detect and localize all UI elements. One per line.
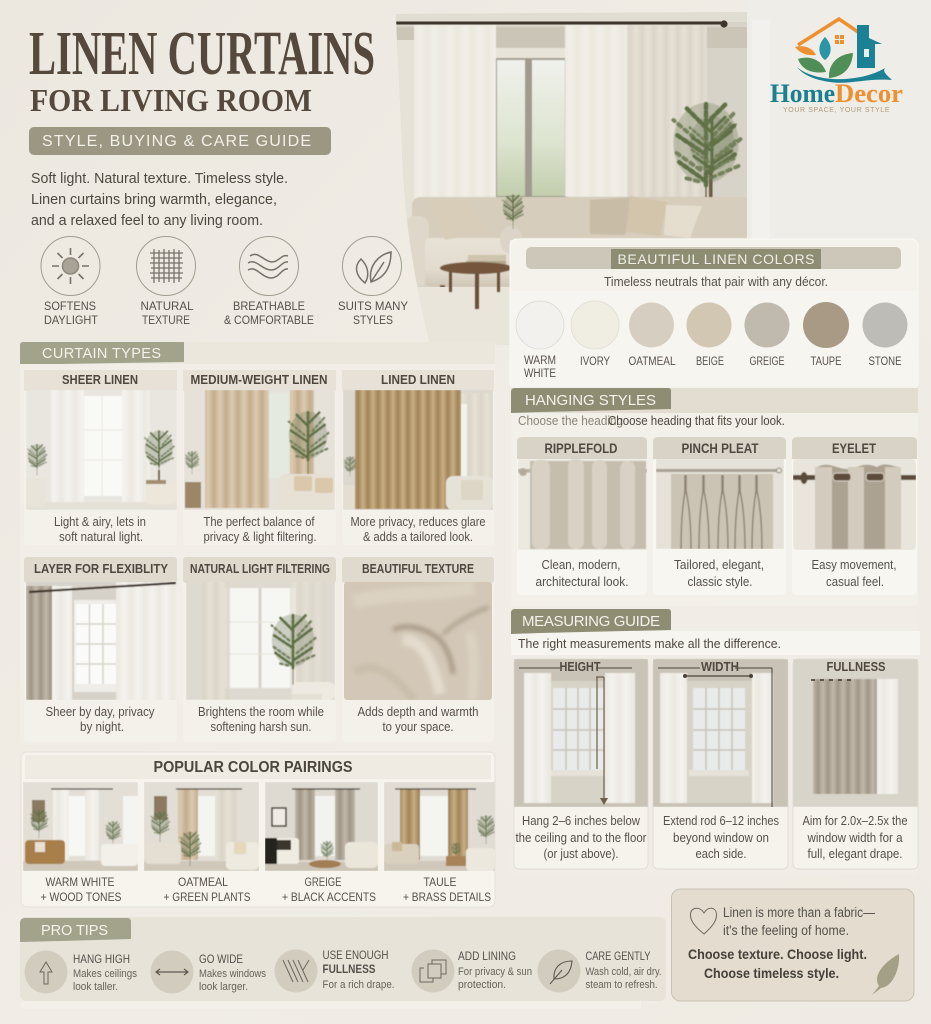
card: natural light filtering: softening harsh sun. xyxy=(210,720,312,734)
pairing labels: + WOOD TONES xyxy=(40,890,122,904)
feature: suits many styles xyxy=(338,236,408,327)
swatch labels: STONE xyxy=(868,356,902,368)
swatch labels xyxy=(524,355,902,380)
panel: hanging styles xyxy=(511,388,918,606)
call to action xyxy=(688,946,867,981)
logo wordmark xyxy=(770,79,903,108)
card: fullness xyxy=(793,659,918,869)
swatch labels: BEIGE xyxy=(696,356,724,368)
pairing labels: + BRASS DETAILS xyxy=(403,890,491,904)
tip: add lining: ADD LINING xyxy=(458,949,516,963)
heading tab xyxy=(20,918,131,942)
logo wordmark: Decor xyxy=(835,79,903,108)
feature: natural texture xyxy=(136,236,196,327)
card: lined linen: & adds a tailored look. xyxy=(363,530,473,544)
logo tagline: YOUR SPACE, YOUR STYLE xyxy=(783,107,890,114)
heading: POPULAR COLOR PAIRINGS xyxy=(154,759,353,776)
card: medium-weight linen: The perfect balance of xyxy=(204,515,315,529)
illustration xyxy=(518,459,647,550)
heading tab: PRO TIPS xyxy=(41,923,108,939)
vase with sprig xyxy=(500,195,524,254)
title: LINEN CURTAINS xyxy=(29,20,375,88)
subheading: Choose heading that fits your look. xyxy=(608,414,785,428)
tip: care gently: Wash cold, air dry. xyxy=(586,966,662,978)
card: width: each side. xyxy=(696,846,746,861)
subheading: Timeless neutrals that pair with any décor. xyxy=(604,274,828,289)
card: beautiful texture xyxy=(342,557,494,742)
feature: breathable: BREATHABLE xyxy=(233,299,305,313)
tip: care gently xyxy=(538,949,662,992)
card: height: Hang 2–6 inches below xyxy=(522,813,641,828)
tip: hang high xyxy=(24,950,137,994)
card: sheer linen: soft natural light. xyxy=(59,530,143,544)
subheading xyxy=(518,414,785,428)
icon: sun xyxy=(41,236,100,296)
icon: leaves xyxy=(342,236,402,296)
card: pinch pleat: classic style. xyxy=(688,574,752,589)
coffee table xyxy=(440,255,512,309)
tip: add lining: For privacy & sun xyxy=(458,966,532,978)
swatches xyxy=(516,301,908,349)
card: eyelet: Easy movement, xyxy=(812,557,896,572)
swatch labels: TAUPE xyxy=(810,356,842,368)
card: eyelet xyxy=(792,437,917,595)
pairing labels: + GREEN PLANTS xyxy=(164,890,250,904)
card: ripplefold: architectural look. xyxy=(536,574,628,589)
feature: softens daylight: DAYLIGHT xyxy=(44,313,99,327)
card: eyelet: casual feel. xyxy=(826,574,884,589)
photo xyxy=(343,390,493,510)
quote text xyxy=(723,905,875,938)
card: medium-weight linen: privacy & light filtering. xyxy=(204,530,316,544)
icon: waves xyxy=(240,236,298,296)
card: lined linen xyxy=(342,370,494,545)
tip: use enough fullness: FULLNESS xyxy=(322,962,376,976)
wall behind logo xyxy=(747,0,931,240)
card: eyelet: EYELET xyxy=(832,441,877,456)
card: natural light filtering: NATURAL LIGHT FILTERING xyxy=(190,562,330,576)
swatch labels: GREIGE xyxy=(750,356,785,368)
card: beautiful texture: Adds depth and warmth xyxy=(358,705,479,719)
sofa xyxy=(408,196,747,287)
swatch labels: OATMEAL xyxy=(628,356,676,368)
photo xyxy=(186,582,335,700)
quote text: Linen is more than a fabric— xyxy=(723,905,875,920)
card: layer for flexibility xyxy=(24,557,177,742)
heading tab: HANGING STYLES xyxy=(525,392,656,409)
tip: use enough fullness: For a rich drape. xyxy=(322,979,394,991)
hero photo: living room with linen curtains xyxy=(396,0,755,347)
tip: go wide: Makes windows xyxy=(199,968,266,980)
card: width: WIDTH xyxy=(701,660,739,674)
photo: taupe xyxy=(384,782,495,871)
subtitle: FOR LIVING ROOM xyxy=(30,82,312,118)
card: width: Extend rod 6–12 inches xyxy=(663,813,779,828)
heading tab: CURTAIN TYPES xyxy=(42,346,161,362)
feature: natural texture: TEXTURE xyxy=(142,313,190,327)
feature: breathable xyxy=(224,236,314,327)
illustration xyxy=(656,459,784,549)
card: height xyxy=(514,659,648,869)
photo xyxy=(26,390,177,510)
panel: measuring guide xyxy=(511,608,920,874)
swatch labels: IVORY xyxy=(580,356,610,368)
card: medium-weight linen: MEDIUM-WEIGHT LINEN xyxy=(190,373,328,387)
logo: HomeDecor xyxy=(770,19,903,114)
heading: BEAUTIFUL LINEN COLORS xyxy=(618,251,814,267)
panel: beautiful linen colors xyxy=(510,239,918,389)
photo: greige xyxy=(265,782,378,871)
tip: add lining xyxy=(412,949,532,992)
callout: linen quote xyxy=(672,889,914,1001)
intro text: Soft light. Natural texture. Timeless style. xyxy=(31,171,288,187)
card: lined linen: More privacy, reduces glare xyxy=(350,515,486,529)
photo: oatmeal xyxy=(144,782,259,871)
pairing labels: + BLACK ACCENTS xyxy=(282,890,376,904)
logo wordmark: Home xyxy=(770,79,835,108)
card: fullness: Aim for 2.0x–2.5x the xyxy=(802,813,908,828)
tip: use enough fullness: USE ENOUGH xyxy=(322,948,388,962)
card: width: beyond window on xyxy=(673,830,769,845)
card: sheer linen: Light & airy, lets in xyxy=(54,515,146,529)
illustration xyxy=(514,659,648,807)
card: pinch pleat: PINCH PLEAT xyxy=(682,441,759,456)
heading tab xyxy=(511,388,671,413)
card: natural light filtering: Brightens the room while xyxy=(198,705,324,719)
card: lined linen: LINED LINEN xyxy=(381,373,455,387)
photo xyxy=(184,390,335,510)
card: fullness: FULLNESS xyxy=(826,660,886,674)
window xyxy=(490,48,568,198)
card: ripplefold: Clean, modern, xyxy=(542,557,620,572)
card: layer for flexibility: LAYER FOR FLEXIBLITY xyxy=(34,562,169,576)
card: height: HEIGHT xyxy=(560,660,601,674)
card: ripplefold xyxy=(517,437,647,595)
tip: add lining: protection. xyxy=(458,979,506,991)
card: pinch pleat xyxy=(653,437,786,595)
icon: leaf xyxy=(872,954,899,995)
feature: suits many styles: STYLES xyxy=(353,313,393,327)
feature: natural texture: NATURAL xyxy=(140,299,194,313)
card: height: (or just above). xyxy=(544,846,618,861)
tip: go wide: look larger. xyxy=(199,981,248,993)
plant xyxy=(673,103,740,213)
icon: weave xyxy=(136,236,196,296)
illustration xyxy=(793,459,916,550)
photo: fabric swirl xyxy=(344,582,492,700)
pairing labels: GREIGE xyxy=(304,875,342,889)
feature: suits many styles: SUITS MANY xyxy=(338,299,408,313)
logo mark xyxy=(795,19,892,83)
icon: heart xyxy=(690,908,717,934)
illustration xyxy=(793,659,918,807)
feature: breathable: & COMFORTABLE xyxy=(224,313,314,327)
call to action: Choose texture. Choose light. xyxy=(688,946,867,962)
call to action: Choose timeless style. xyxy=(704,965,839,981)
tip: care gently: steam to refresh. xyxy=(586,979,658,991)
curtain rod xyxy=(396,20,728,28)
tip: care gently: CARE GENTLY xyxy=(586,949,650,963)
quote text: it's the feeling of home. xyxy=(723,923,849,938)
card: fullness: full, elegant drape. xyxy=(808,846,902,861)
intro text: Linen curtains bring warmth, elegance, xyxy=(31,192,277,208)
pairing labels: TAULE xyxy=(424,875,456,889)
swatch labels: WHITE xyxy=(524,368,556,380)
tip: use enough fullness xyxy=(274,948,394,992)
card: width xyxy=(653,659,788,869)
tip: hang high: HANG HIGH xyxy=(73,952,130,966)
panel: popular color pairings xyxy=(21,752,495,907)
tip: go wide xyxy=(150,950,266,994)
heading xyxy=(526,247,901,269)
panel: curtain types xyxy=(20,342,495,745)
pairing labels xyxy=(40,875,491,904)
card: ripplefold: RIPPLEFOLD xyxy=(544,441,618,456)
guide banner: STYLE, BUYING & CARE GUIDE xyxy=(42,133,311,150)
tip: hang high: look taller. xyxy=(73,981,118,993)
feature: softens daylight xyxy=(41,236,100,327)
swatch labels: WARM xyxy=(524,355,556,367)
card: fullness: window width for a xyxy=(807,830,903,845)
card: layer for flexibility: Sheer by day, privacy xyxy=(46,705,155,719)
illustration xyxy=(653,659,788,807)
sheer curtains xyxy=(414,25,707,200)
card: layer for flexibility: by night. xyxy=(80,720,124,734)
subheading: The right measurements make all the difference. xyxy=(518,636,781,651)
pairing labels: OATMEAL xyxy=(178,875,228,889)
card: medium-weight linen xyxy=(183,370,336,545)
card: beautiful texture: to your space. xyxy=(382,720,454,734)
intro text: and a relaxed feel to any living room. xyxy=(31,213,263,229)
tip: hang high: Makes ceilings xyxy=(73,968,137,980)
card: sheer linen xyxy=(24,370,177,545)
card: pinch pleat: Tailored, elegant, xyxy=(674,557,764,572)
pairing labels: WARM WHITE xyxy=(46,875,114,889)
subheading: Choose the heading xyxy=(518,414,623,428)
card: natural light filtering xyxy=(183,557,336,742)
photo xyxy=(26,582,177,700)
card: beautiful texture: BEAUTIFUL TEXTURE xyxy=(362,562,474,576)
feature: softens daylight: SOFTENS xyxy=(44,299,96,313)
guide banner xyxy=(29,127,331,155)
heading tab xyxy=(20,342,184,364)
card: height: the ceiling and to the floor xyxy=(516,830,647,845)
card: sheer linen: SHEER LINEN xyxy=(62,373,138,387)
intro text xyxy=(31,171,288,229)
heading tab xyxy=(511,609,671,634)
heading tab: MEASURING GUIDE xyxy=(522,613,660,630)
photo: warm white xyxy=(23,782,138,871)
panel: pro tips xyxy=(20,917,666,1009)
floor xyxy=(418,287,510,345)
tip: go wide: GO WIDE xyxy=(199,952,243,966)
